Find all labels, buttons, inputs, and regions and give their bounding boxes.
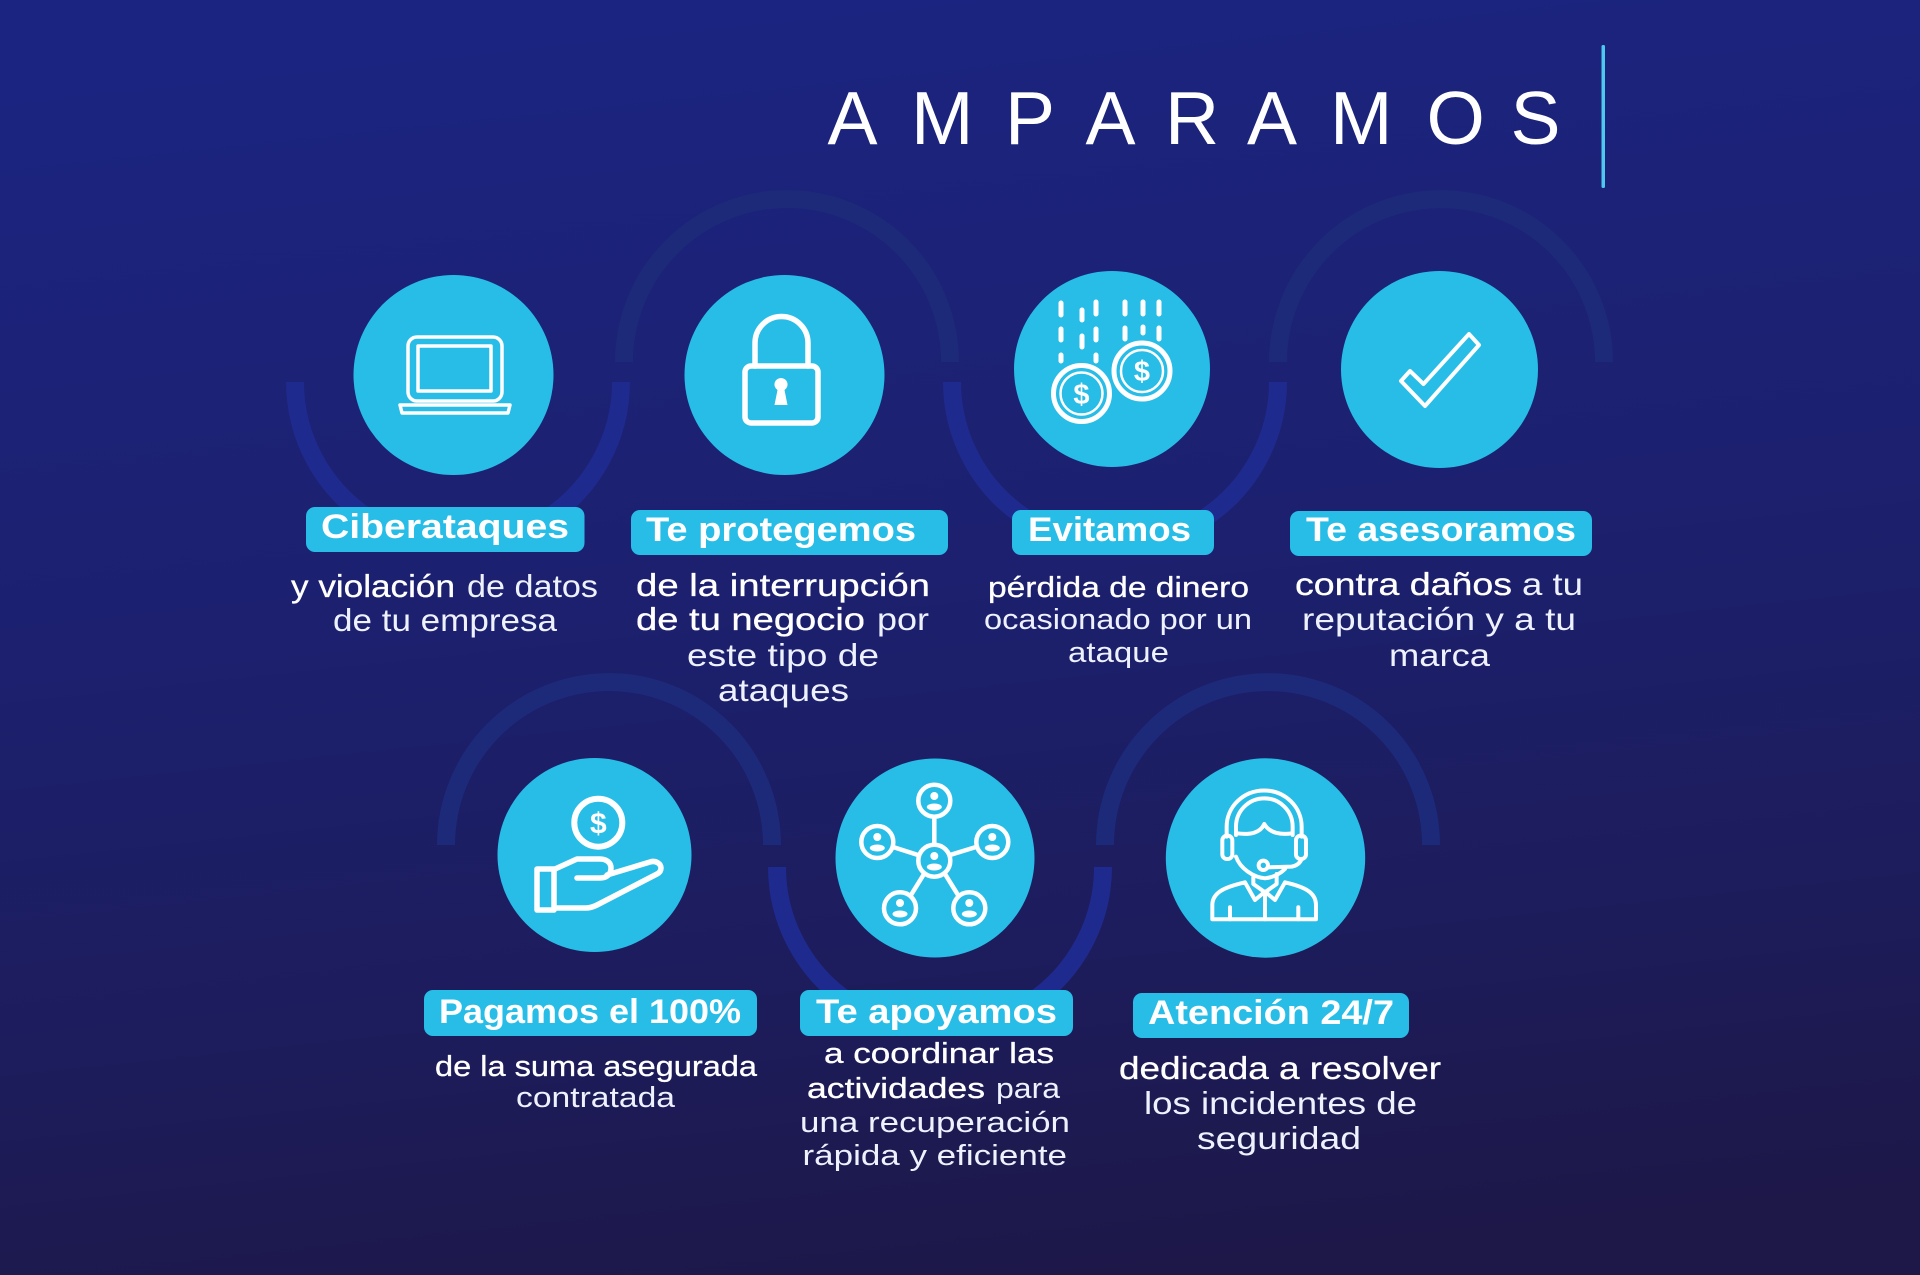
description: ocasionado por un <box>984 604 1252 636</box>
description: para <box>996 1073 1061 1105</box>
panel: pagamos el 100% <box>424 758 758 1114</box>
icon: padlock <box>684 275 884 475</box>
description <box>800 1038 1070 1172</box>
description: una recuperación <box>800 1107 1070 1139</box>
description <box>636 567 930 708</box>
decorative arcs <box>295 199 1604 1002</box>
panel: te apoyamos <box>800 758 1073 1172</box>
description: reputación y a tu <box>1302 601 1576 637</box>
description: los incidentes de <box>1144 1085 1417 1121</box>
icon: hand with coin <box>498 758 692 952</box>
description: actividades <box>807 1073 985 1105</box>
icon: people network <box>836 758 1034 958</box>
description <box>1119 1050 1441 1156</box>
description: a tu <box>1522 566 1583 602</box>
description <box>291 568 598 638</box>
description <box>435 1051 758 1114</box>
description: dedicada a resolver <box>1119 1050 1441 1086</box>
description: de la interrupción <box>636 567 930 603</box>
description: por <box>877 601 929 637</box>
description: este tipo de <box>687 637 879 673</box>
description: contra daños <box>1295 566 1512 602</box>
label pill: Te protegemos <box>646 511 916 549</box>
description <box>1295 566 1583 673</box>
label pill: Atención 24/7 <box>1148 994 1394 1032</box>
description: ataques <box>718 672 849 708</box>
label pill <box>1133 993 1409 1038</box>
description: de datos <box>467 568 598 604</box>
label pill: Te apoyamos <box>816 993 1057 1031</box>
icon: falling coins: $ <box>1134 356 1150 388</box>
icon: support agent <box>1166 758 1365 958</box>
description: contratada <box>516 1082 676 1114</box>
label pill <box>1012 510 1214 555</box>
label pill: Pagamos el 100% <box>439 993 741 1031</box>
panel: te asesoramos <box>1290 271 1592 673</box>
label pill: Evitamos <box>1028 511 1191 549</box>
icon: falling coins: $ <box>1073 379 1090 411</box>
label pill <box>306 507 584 552</box>
label pill <box>1290 511 1592 556</box>
icon: hand with coin: $ <box>590 808 607 840</box>
icon: falling coins <box>1014 271 1210 467</box>
description: de la suma asegurada <box>435 1051 758 1083</box>
label pill <box>800 990 1073 1036</box>
title accent line <box>1602 45 1605 188</box>
description: pérdida de dinero <box>988 572 1249 604</box>
icon: check mark <box>1341 271 1538 468</box>
description: ataque <box>1068 637 1169 669</box>
panel: ciberataques <box>291 275 598 638</box>
description: rápida y eficiente <box>802 1140 1067 1172</box>
title: AMPARAMOS <box>828 76 1561 160</box>
icon: laptop <box>354 275 554 475</box>
panel: te protegemos <box>631 275 948 708</box>
panel: atención 24/7 <box>1119 758 1441 1156</box>
panel: evitamos <box>984 271 1252 669</box>
label pill: Ciberataques <box>321 508 569 546</box>
label pill <box>631 510 948 555</box>
description: de tu empresa <box>333 602 558 638</box>
description: seguridad <box>1197 1120 1361 1156</box>
description: de tu negocio <box>636 601 865 637</box>
description: y violación <box>291 568 455 604</box>
description: marca <box>1389 637 1491 673</box>
description <box>984 572 1252 669</box>
label pill: Te asesoramos <box>1306 511 1576 549</box>
description: a coordinar las <box>824 1038 1054 1070</box>
